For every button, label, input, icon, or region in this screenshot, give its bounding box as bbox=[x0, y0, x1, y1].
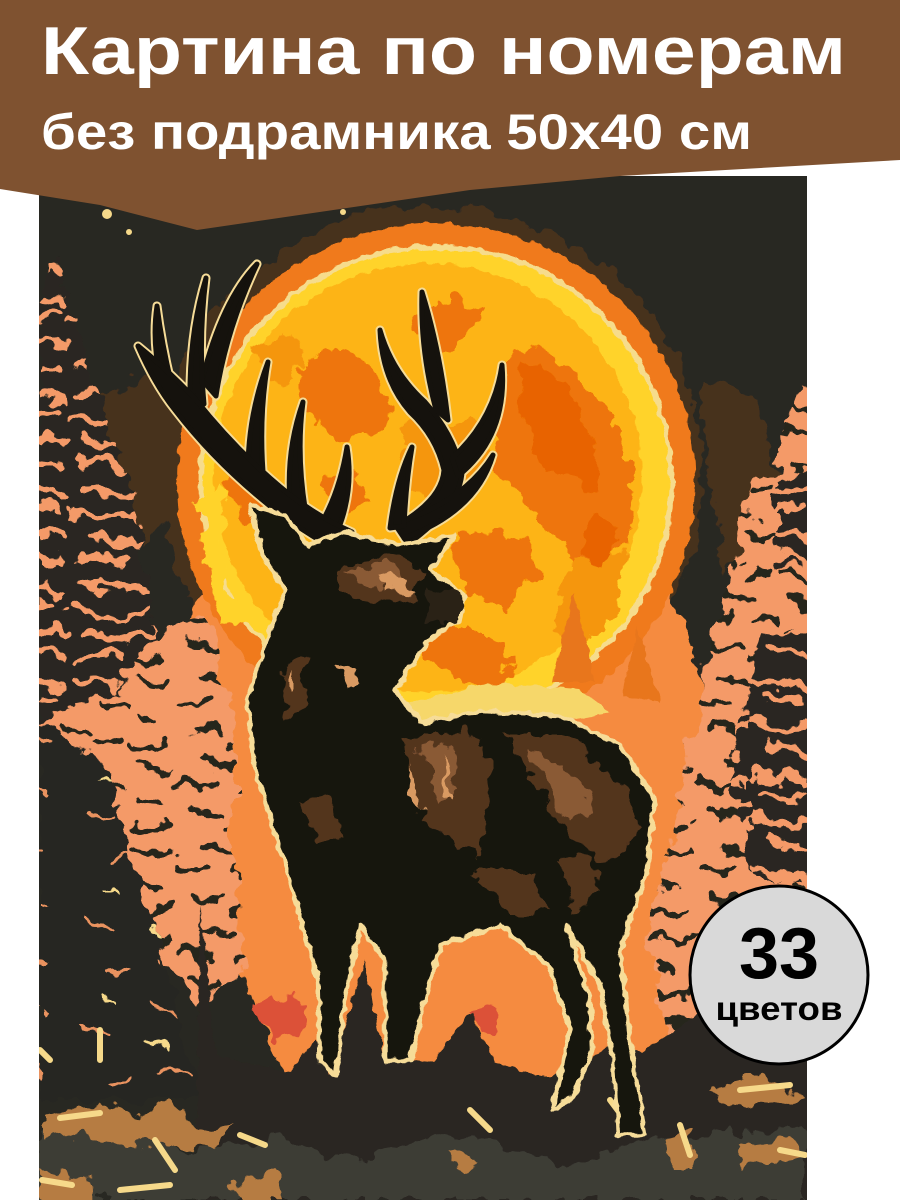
badge: colour count: 33 bbox=[739, 914, 819, 994]
badge: colour count bbox=[690, 886, 868, 1064]
orange glow behind the stag bbox=[182, 560, 700, 1080]
forest floor with light branches bbox=[39, 1030, 809, 1200]
brown halo around the moon bbox=[100, 203, 782, 608]
right pine trees bbox=[644, 386, 807, 1035]
badge: colour count: цветов bbox=[716, 990, 842, 1027]
distant dark tree line bbox=[197, 906, 705, 1086]
subtitle: без подрамника 50х40 см bbox=[41, 104, 752, 160]
stag antlers bbox=[138, 264, 503, 552]
moon bbox=[177, 223, 695, 741]
banner background bbox=[0, 0, 900, 230]
stag bbox=[138, 264, 655, 1135]
left pine trees bbox=[39, 255, 245, 1100]
stag body bbox=[247, 505, 655, 1135]
panel: painting of a stag before the moon bbox=[39, 176, 830, 1200]
stag fur highlights bbox=[280, 554, 639, 920]
title: Картина по номерам bbox=[41, 13, 846, 89]
stars bbox=[102, 209, 346, 235]
